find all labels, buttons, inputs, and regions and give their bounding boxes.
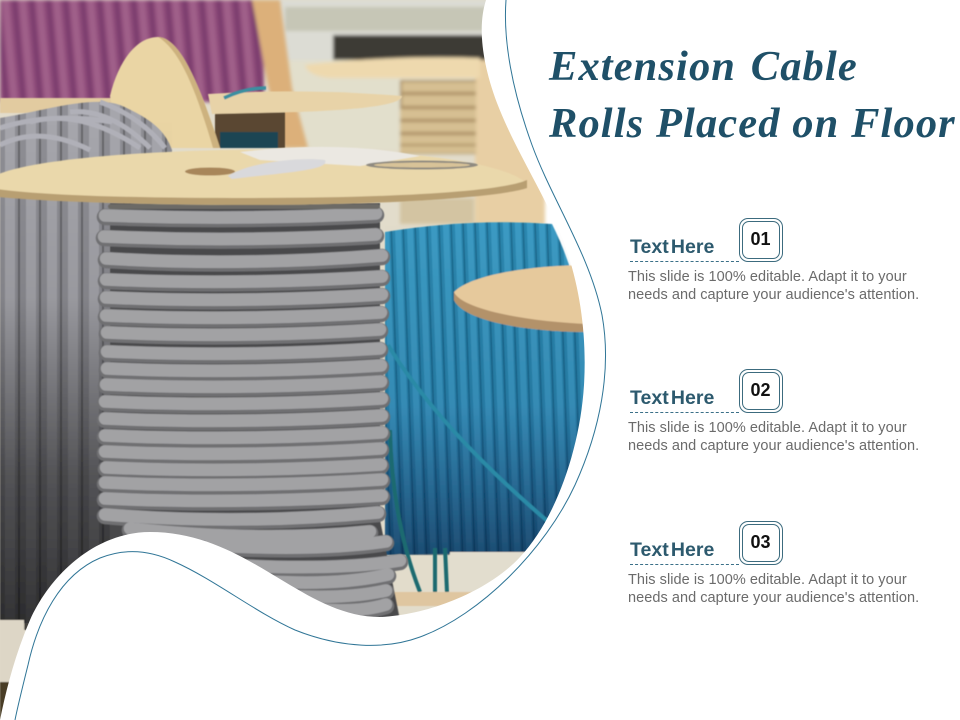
item 02 description xyxy=(628,420,919,454)
item 03 description xyxy=(628,572,919,606)
grey cable reel, left xyxy=(0,102,172,720)
thin blue curve xyxy=(15,0,606,720)
item 01 xyxy=(628,218,919,303)
photo background xyxy=(0,0,545,720)
item 01 heading: Text Here xyxy=(630,236,714,258)
stacked grey cable coil xyxy=(104,203,400,620)
item 03 heading: Text Here xyxy=(630,539,714,561)
top flange of coil spool xyxy=(0,147,527,205)
item 03 number badge: 03 xyxy=(750,532,771,552)
blue cable reel xyxy=(385,222,590,606)
title xyxy=(548,43,956,147)
item 02 dashed rule xyxy=(630,412,739,413)
item 02 description: This slide is 100% editable. Adapt it to your xyxy=(628,420,907,436)
item 01 number badge xyxy=(739,218,783,262)
item 02 number badge: 02 xyxy=(750,380,771,400)
wooden reel flange xyxy=(0,37,402,148)
item 03 number badge xyxy=(739,521,783,565)
item 02 description: needs and capture your audience's attention. xyxy=(628,438,919,454)
item 02 heading: Text Here xyxy=(630,387,714,409)
item 01 dashed rule xyxy=(630,261,739,262)
purple cable reel xyxy=(0,0,308,148)
item 01 description xyxy=(628,269,919,303)
item 01 description: needs and capture your audience's attention. xyxy=(628,287,919,303)
title: Extension Cable xyxy=(549,43,858,90)
item 01 description: This slide is 100% editable. Adapt it to your xyxy=(628,269,907,285)
title: Rolls Placed on Floor xyxy=(549,100,956,147)
item 02 number badge xyxy=(739,369,783,413)
item 01 number badge: 01 xyxy=(750,229,771,249)
item 03 xyxy=(628,521,919,606)
item 03 dashed rule xyxy=(630,564,739,565)
item 03 description: needs and capture your audience's attention. xyxy=(628,590,919,606)
item 03 description: This slide is 100% editable. Adapt it to your xyxy=(628,572,907,588)
item 02 xyxy=(628,369,919,454)
